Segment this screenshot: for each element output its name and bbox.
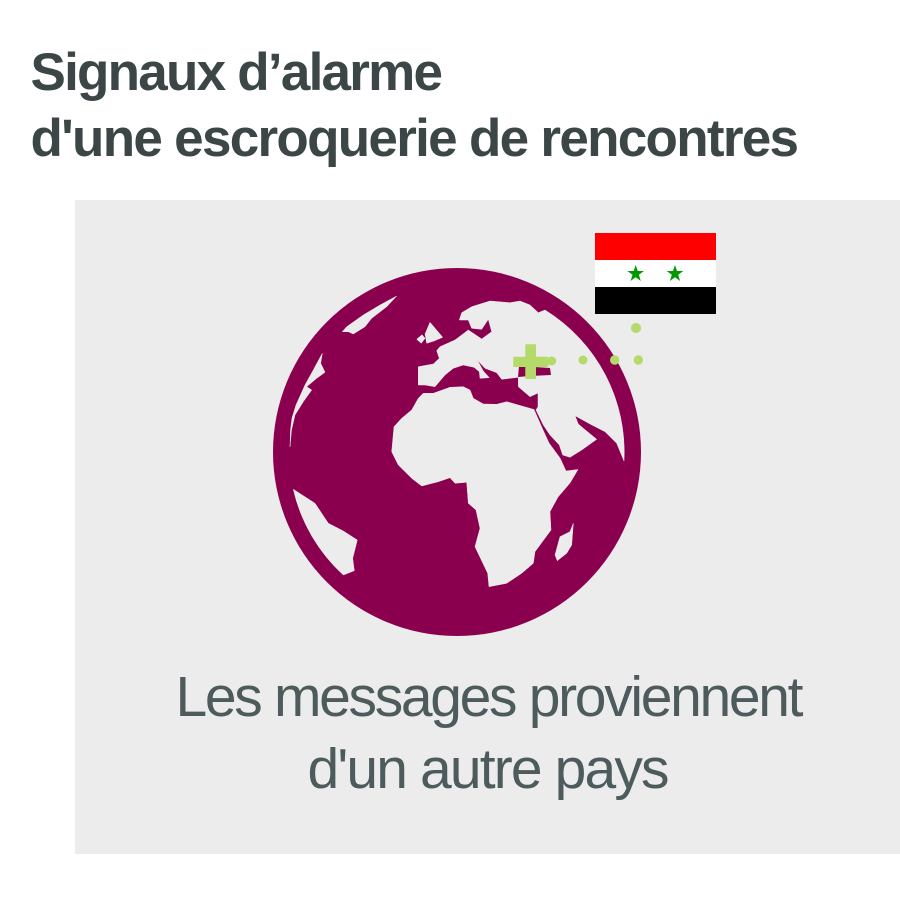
land: Madagascar [555, 523, 573, 561]
land: Americas sliver [290, 353, 325, 447]
land: Eurasia [418, 301, 624, 461]
caption [176, 665, 804, 801]
caption: d'un autre pays [308, 737, 670, 801]
land: South America sliver [293, 489, 357, 575]
icon: location cross marker [513, 344, 548, 379]
land: Africa [392, 387, 578, 587]
title: Signaux d’alarme [30, 43, 443, 102]
caption: Les messages proviennent [176, 665, 804, 729]
icon: globe [273, 268, 641, 636]
panel: grey background [75, 200, 900, 854]
icon: flag [595, 233, 716, 314]
title [30, 43, 799, 168]
land: Iceland [417, 322, 443, 343]
land: Greenland sliver [342, 296, 397, 334]
title: d'une escroquerie de rencontres [30, 109, 799, 168]
sea: Black Sea [518, 366, 551, 377]
dotted route [547, 323, 643, 366]
